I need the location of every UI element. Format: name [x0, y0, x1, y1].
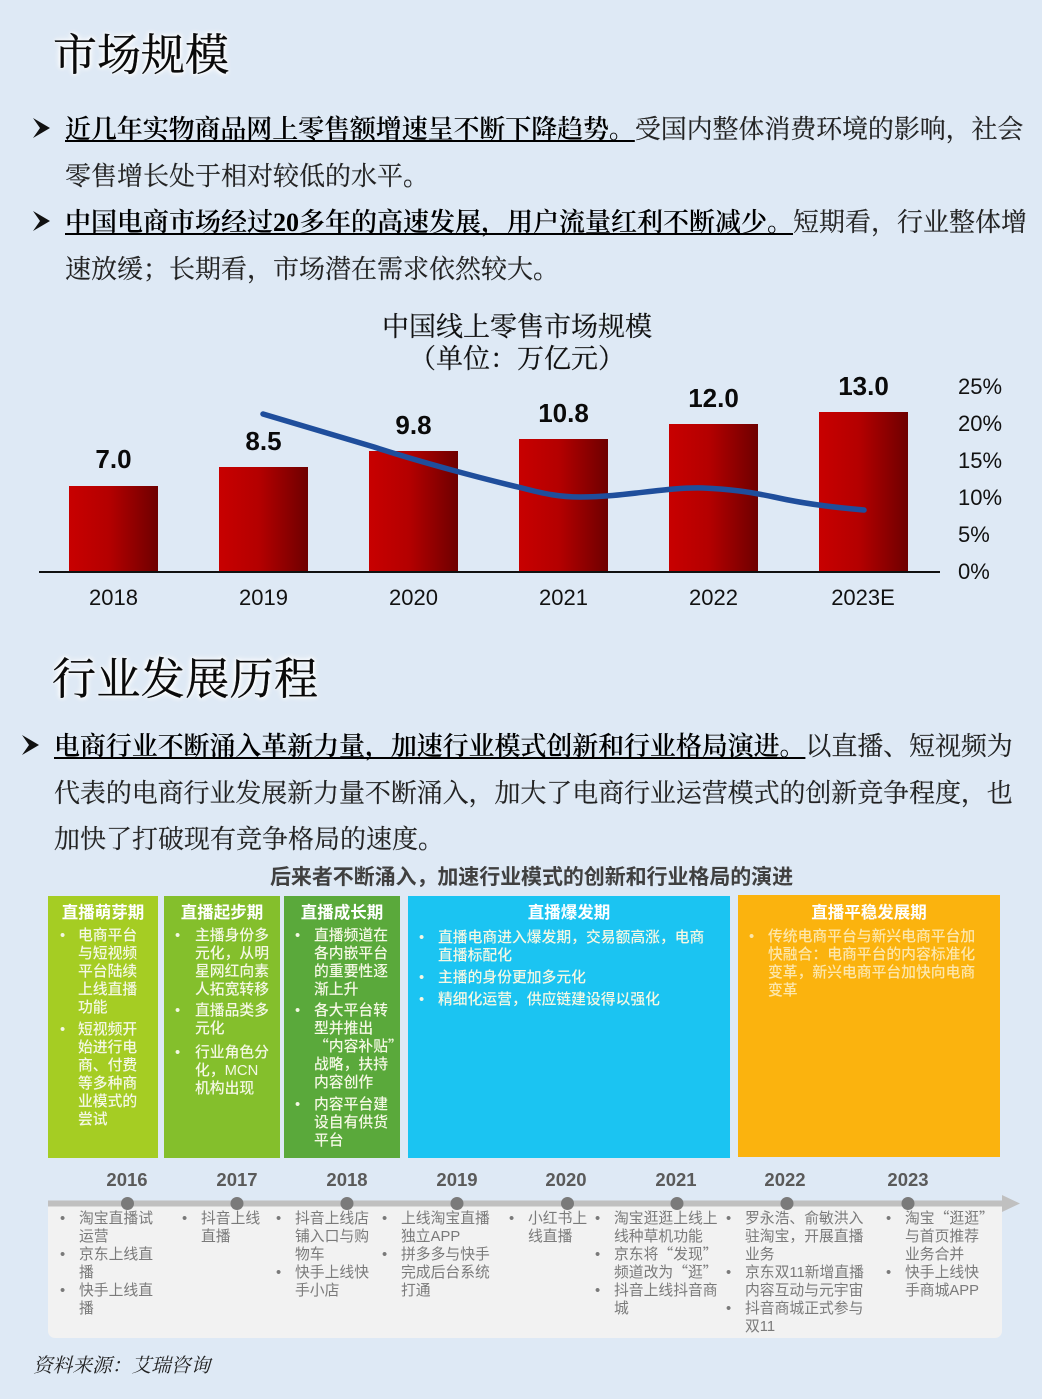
events 2021 [595, 1210, 718, 1317]
bar value labels [95, 371, 889, 474]
stage bullets: 快融合：电商平台的内容标准化 [768, 947, 975, 963]
stage bullets: 业模式的 [78, 1094, 137, 1110]
chart title: 中国线上零售市场规模 [382, 312, 652, 342]
events 2018: • [276, 1211, 281, 1227]
year labels: 2023E [831, 585, 895, 610]
stage bullets: • [295, 1003, 300, 1019]
events 2021: 抖音上线抖音商 [614, 1283, 718, 1299]
stage bullets [60, 927, 137, 1128]
x axis [39, 571, 940, 573]
bullet paragraph 1 [33, 115, 1023, 191]
stage bullets: • [175, 928, 180, 944]
events 2016: 京东上线直 [79, 1247, 153, 1263]
arrow bullet [22, 735, 39, 755]
growth line [263, 414, 864, 510]
right axis labels: 5% [958, 522, 990, 547]
stage bullets: 型并推出 [314, 1021, 373, 1037]
chart title: （单位：万亿元） [409, 344, 625, 374]
timeline years [106, 1169, 929, 1190]
events 2018: • [276, 1265, 281, 1281]
events 2020: 小红书上 [528, 1211, 587, 1227]
arrow bullet [33, 211, 50, 231]
stage bullets: • [295, 928, 300, 944]
paragraph 3 line 3: 加快了打破现有竞争格局的速度。 [54, 825, 444, 854]
events 2023: 手商城APP [905, 1283, 979, 1299]
panel: live commerce explosive stage [408, 896, 730, 1158]
paragraph 1 line 2: 零售增长处于相对较低的水平。 [65, 162, 429, 191]
stage bullets: 内容创作 [314, 1075, 373, 1091]
events 2017: • [182, 1211, 187, 1227]
events 2018: 物车 [295, 1247, 325, 1263]
stage bullets: 等多种商 [78, 1076, 137, 1092]
events 2019: 独立APP [401, 1229, 460, 1245]
stage bullets: 商、付费 [78, 1058, 137, 1074]
events 2021: • [595, 1247, 600, 1263]
stage bullets: 主播身份多 [195, 928, 269, 944]
bullet paragraph 3 [22, 732, 1013, 854]
heading: industry history: 行业发展历程 [52, 655, 318, 704]
events 2020 [509, 1210, 587, 1245]
arrow bullet [33, 118, 50, 138]
stage title: 直播起步期 [181, 904, 263, 922]
events 2016: 运营 [79, 1229, 109, 1245]
events 2021: 淘宝逛逛上线上 [614, 1211, 718, 1227]
stage bullets: 平台陆续 [78, 964, 137, 980]
timeline years: 2023 [887, 1169, 929, 1190]
events 2019: 拼多多与快手 [401, 1247, 490, 1263]
events 2022 [726, 1210, 864, 1335]
timeline years: 2017 [216, 1169, 258, 1190]
events 2018 [276, 1210, 369, 1299]
stage bullets: • [295, 1097, 300, 1113]
events 2023: • [886, 1211, 891, 1227]
stage bullets: 设自有供货 [314, 1115, 388, 1131]
events 2023: 与首页推荐 [905, 1229, 979, 1245]
events 2019: • [382, 1211, 387, 1227]
stage bullets: • [419, 970, 424, 986]
stage bullets [749, 928, 975, 999]
stage bullets: 各大平台转 [314, 1003, 388, 1019]
events 2018: 铺入口与购 [295, 1229, 369, 1245]
events 2022: 抖音商城正式参与 [745, 1301, 863, 1317]
combo chart: bars and growth line [39, 371, 1002, 610]
events 2021: • [595, 1211, 600, 1227]
events 2016: 快手上线直 [79, 1283, 153, 1299]
right axis labels: 25% [958, 374, 1002, 399]
events 2020: • [509, 1211, 514, 1227]
right axis labels: 0% [958, 559, 990, 584]
timeline years: 2022 [764, 1169, 806, 1190]
right axis labels [958, 374, 1002, 584]
stage bullets: 变革 [768, 983, 798, 999]
right axis labels: 20% [958, 411, 1002, 436]
events 2022: 业务 [745, 1247, 775, 1263]
bar value labels: 10.8 [538, 398, 589, 428]
paragraph 3 line 2: 代表的电商行业发展新力量不断涌入，加大了电商行业运营模式的创新竞争程度，也 [54, 779, 1013, 808]
stage bullets: 各内嵌平台 [314, 946, 388, 962]
timeline years: 2019 [436, 1169, 478, 1190]
year labels: 2022 [689, 585, 738, 610]
stage bullets: • [749, 929, 754, 945]
stage bullets: “内容补贴” [314, 1035, 403, 1056]
stage bullets: • [175, 1003, 180, 1019]
stage bullets: 人拓宽转移 [195, 982, 269, 998]
bar value labels: 9.8 [395, 410, 432, 440]
events 2018: 抖音上线店 [295, 1211, 369, 1227]
events 2022: • [726, 1211, 731, 1227]
stage bullets: 上线直播 [78, 982, 137, 998]
events 2022: • [726, 1301, 731, 1317]
stage bullets: 精细化运营，供应链建设得以强化 [438, 992, 660, 1008]
events 2016: • [60, 1283, 65, 1299]
bar value labels: 12.0 [688, 383, 739, 413]
events 2021: 线种草机功能 [614, 1229, 703, 1245]
stage bullets: 短视频开 [78, 1022, 137, 1038]
events 2019: 打通 [401, 1283, 431, 1299]
events 2018: 快手上线快 [295, 1265, 369, 1281]
paragraph 2 line 2: 速放缓；长期看，市场潜在需求依然较大。 [65, 255, 559, 284]
stage bullets: • [419, 992, 424, 1008]
panel: live commerce stable stage [738, 895, 1000, 1157]
bullet paragraph 2 [33, 208, 1027, 284]
panel: live commerce growth stage [284, 896, 400, 1158]
timeline years: 2020 [545, 1169, 587, 1190]
events 2019: 完成后台系统 [401, 1265, 490, 1281]
year labels: 2020 [389, 585, 438, 610]
events 2021: 城 [614, 1301, 629, 1317]
stage bullets: • [60, 1022, 65, 1038]
timeline years: 2016 [106, 1169, 148, 1190]
stage bullets: 始进行电 [78, 1040, 137, 1056]
events 2021: 京东将“发现” [614, 1243, 718, 1264]
stage bullets [175, 927, 269, 1097]
stage title: 直播萌芽期 [62, 904, 144, 922]
events 2023 [886, 1207, 994, 1299]
year labels: 2018 [89, 585, 138, 610]
events 2022: 内容互动与元宇宙 [745, 1283, 863, 1299]
stage bullets: 直播标配化 [438, 948, 512, 964]
bar value labels: 7.0 [95, 444, 132, 474]
events 2016 [60, 1210, 153, 1317]
events 2019: 上线淘宝直播 [401, 1211, 490, 1227]
year labels [89, 585, 895, 610]
stage bullets: 与短视频 [78, 946, 137, 962]
stage bullets: 直播电商进入爆发期，交易额高涨，电商 [438, 930, 704, 946]
events 2023: 淘宝“逛逛” [905, 1207, 994, 1228]
paragraph 1 line 1: 近几年实物商品网上零售额增速呈不断下降趋势。受国内整体消费环境的影响，社会 [65, 115, 1023, 144]
source note: 资料来源：艾瑞咨询 [33, 1355, 210, 1377]
right axis labels: 15% [958, 448, 1002, 473]
stage bullets: 功能 [78, 1000, 108, 1016]
events 2019: • [382, 1247, 387, 1263]
stage title: 直播成长期 [301, 904, 383, 922]
stage bullets: 电商平台 [78, 928, 137, 944]
chart title [382, 312, 652, 374]
stage bullets: 主播的身份更加多元化 [438, 970, 586, 986]
events 2023: 快手上线快 [905, 1265, 979, 1281]
timeline years: 2021 [655, 1169, 697, 1190]
bars [69, 412, 908, 572]
stage bullets: 直播频道在 [314, 928, 388, 944]
events 2022: 罗永浩、俞敏洪入 [745, 1211, 863, 1227]
stage bullets: 渐上升 [314, 982, 358, 998]
stage bullets: 直播品类多 [195, 1003, 269, 1019]
events 2022: 双11 [745, 1319, 775, 1335]
events 2022: • [726, 1265, 731, 1281]
bar value labels: 13.0 [838, 371, 889, 401]
events 2023: • [886, 1265, 891, 1281]
stage bullets: 内容平台建 [314, 1097, 388, 1113]
timeline arrow with year dots [48, 1195, 1020, 1212]
events 2022: 京东双11新增直播 [745, 1265, 864, 1281]
stage title: 直播平稳发展期 [811, 904, 927, 922]
timeline events panel [48, 1205, 1002, 1338]
events 2016: • [60, 1211, 65, 1227]
stage bullets: 传统电商平台与新兴电商平台加 [768, 929, 975, 945]
events 2021: 频道改为“逛” [614, 1261, 718, 1282]
events 2023: 业务合并 [905, 1247, 964, 1263]
events 2016: 播 [79, 1265, 94, 1281]
events 2016: 淘宝直播试 [79, 1211, 153, 1227]
paragraph 3 line 1: 电商行业不断涌入革新力量，加速行业模式创新和行业格局演进。以直播、短视频为 [54, 732, 1013, 761]
events 2017 [182, 1210, 260, 1245]
stage bullets: 变革，新兴电商平台加快向电商 [768, 965, 975, 981]
timeline years: 2018 [326, 1169, 368, 1190]
stage bullets: 平台 [314, 1133, 344, 1149]
events 2020: 线直播 [528, 1229, 572, 1245]
heading: market size: 市场规模 [53, 31, 229, 80]
panel: live commerce budding stage [48, 896, 158, 1158]
stage bullets: 尝试 [78, 1112, 108, 1128]
stage bullets: • [175, 1045, 180, 1061]
stage bullets: 元化，从明 [195, 946, 269, 962]
stage bullets: 战略，扶持 [314, 1057, 388, 1073]
events 2016: 播 [79, 1301, 94, 1317]
stage bullets: 行业角色分 [195, 1045, 269, 1061]
paragraph 2 line 1: 中国电商市场经过20多年的高速发展，用户流量红利不断减少。短期看，行业整体增 [65, 208, 1027, 237]
diagram title: 后来者不断涌入，加速行业模式的创新和行业格局的演进 [270, 866, 793, 889]
stage bullets [419, 929, 704, 1008]
year labels: 2019 [239, 585, 288, 610]
year labels: 2021 [539, 585, 588, 610]
stage bullets: 元化 [195, 1021, 225, 1037]
events 2019 [382, 1210, 490, 1299]
events 2018: 手小店 [295, 1283, 339, 1299]
events 2017: 抖音上线 [201, 1211, 260, 1227]
bar value labels: 8.5 [245, 426, 282, 456]
stage bullets: 星网红向素 [195, 964, 269, 980]
stage bullets: • [419, 930, 424, 946]
right axis labels: 10% [958, 485, 1002, 510]
events 2021: • [595, 1283, 600, 1299]
stage bullets: 的重要性逐 [314, 964, 388, 980]
stage bullets: 化，MCN [195, 1063, 258, 1079]
events 2016: • [60, 1247, 65, 1263]
panel: live commerce starting stage [164, 896, 280, 1158]
events 2022: 驻淘宝，开展直播 [745, 1229, 863, 1245]
stage bullets: • [60, 928, 65, 944]
stage bullets: 机构出现 [195, 1081, 254, 1097]
events 2017: 直播 [201, 1229, 231, 1245]
stage title: 直播爆发期 [528, 904, 610, 922]
stage bullets [295, 927, 403, 1149]
